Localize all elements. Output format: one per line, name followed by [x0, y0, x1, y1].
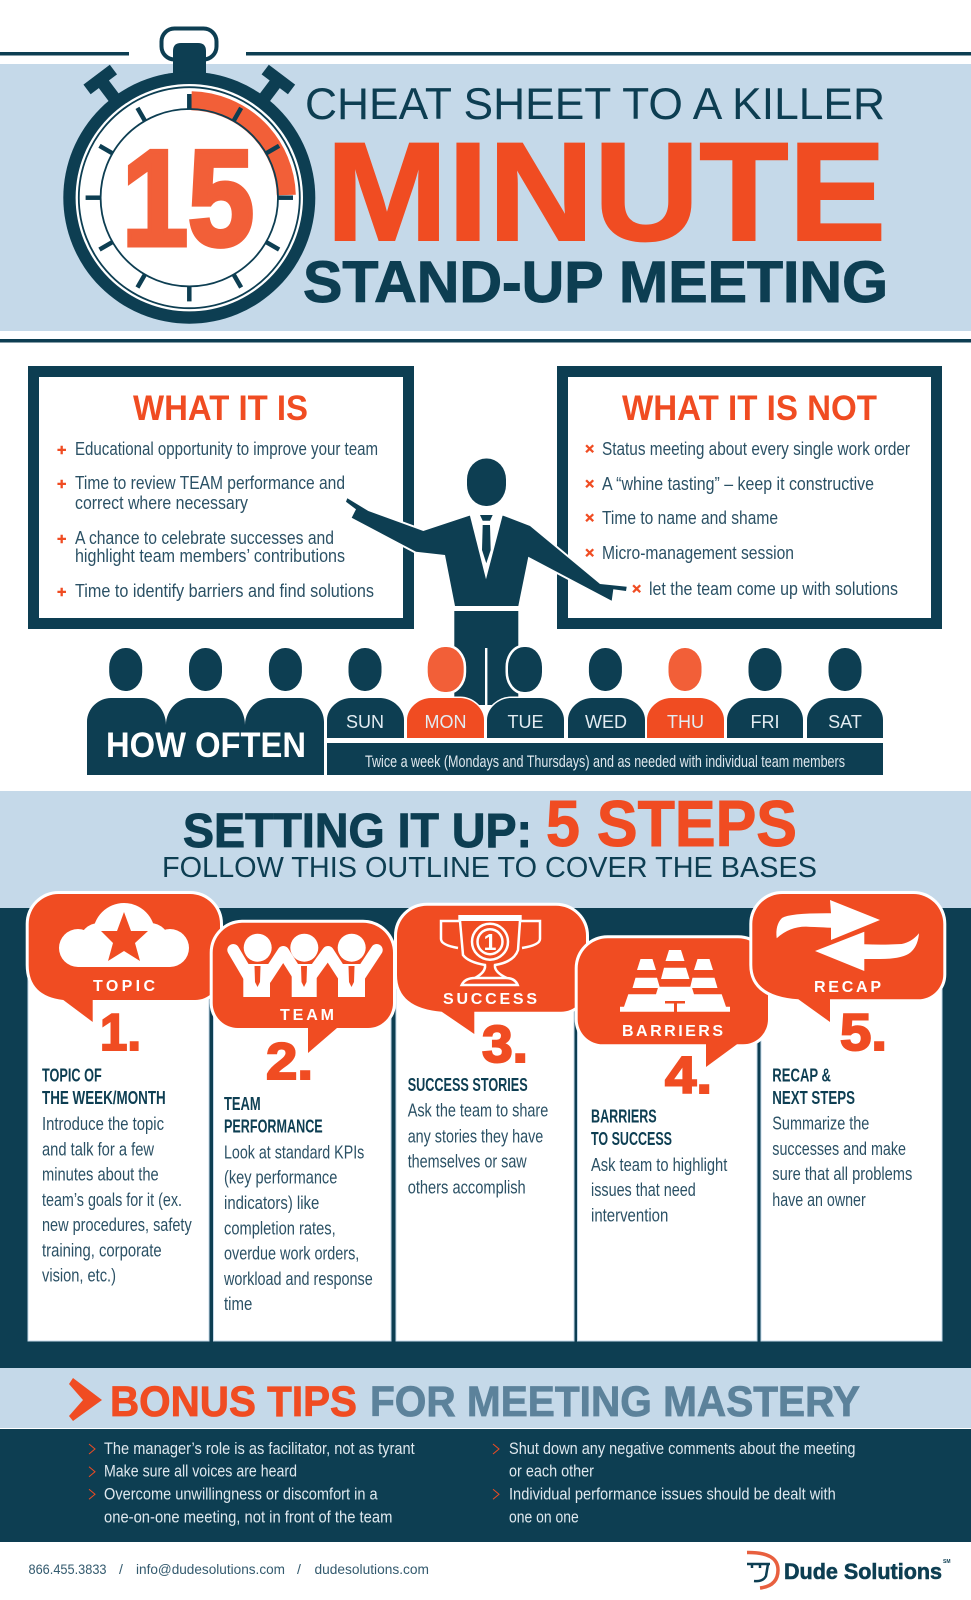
panel: what it is not: × — [585, 510, 594, 527]
step 1: topic: Introduce the topic — [42, 1114, 164, 1134]
step 5: recap: RECAP — [814, 979, 881, 996]
weekday row: FRI — [750, 712, 780, 732]
step 2: team — [213, 923, 393, 1314]
panel: what it is not: A “whine tasting” – keep it constructive — [602, 474, 874, 494]
panel: what it is not: Status meeting about every single work order — [602, 439, 910, 459]
heading: setting it up — [162, 787, 817, 884]
step 3: success: others accomplish — [408, 1177, 526, 1197]
footer contact: dudesolutions.com — [314, 1561, 429, 1577]
step 5: recap: successes and make — [772, 1139, 906, 1159]
icon: three team members — [233, 934, 377, 997]
weekday row: WED — [585, 712, 627, 732]
step 1: topic: new procedures, safety — [42, 1215, 192, 1235]
title: STAND-UP MEETING — [303, 250, 888, 315]
heading: setting it up: FOLLOW THIS OUTLINE TO COVER THE BASES — [162, 852, 817, 884]
bonus tips list: one-on-one meeting, not in front of the team — [104, 1507, 392, 1526]
footer contact: info@dudesolutions.com — [136, 1561, 285, 1577]
how often block: HOW OFTEN — [106, 726, 306, 765]
panel: what it is not: let the team come up with solutions — [649, 579, 898, 599]
panel: what it is: A chance to celebrate successes and — [75, 528, 334, 548]
panel: what it is not — [562, 372, 936, 624]
weekday row: MON — [424, 712, 466, 732]
title: CHEAT SHEET TO A KILLER — [305, 80, 885, 129]
heading: setting it up: SETTING IT UP: — [183, 805, 532, 858]
presenter figure — [346, 458, 627, 708]
step 2: team: TEAM — [280, 1007, 334, 1024]
step 1: topic: and talk for a few — [42, 1139, 155, 1159]
step 3: success: any stories they have — [408, 1126, 543, 1146]
step 3: success: Ask the team to share — [408, 1101, 548, 1121]
icon: traffic cones — [620, 950, 730, 1012]
weekday row: SAT — [828, 712, 862, 732]
step 5: recap: sure that all problems — [772, 1164, 912, 1184]
step 3: success: themselves or saw — [408, 1151, 527, 1171]
panel: what it is not: Time to name and shame — [602, 508, 778, 528]
step 4: barriers: 4. — [665, 1047, 712, 1105]
icon: stopwatch — [63, 28, 315, 324]
icon: trophy — [441, 915, 540, 985]
footer contact: / — [119, 1561, 123, 1577]
step 1: topic: TOPIC OF — [42, 1065, 102, 1086]
panel: what it is: + — [57, 531, 66, 548]
step 5: recap: have an owner — [772, 1190, 866, 1210]
step 4: barriers: Ask team to highlight — [591, 1155, 727, 1175]
step 2: team: TEAM — [224, 1093, 261, 1114]
weekday row — [327, 698, 883, 775]
step 3: success — [397, 906, 586, 1197]
bonus tips heading: FOR MEETING MASTERY — [370, 1378, 860, 1426]
logo: Dude Solutions — [747, 1552, 950, 1588]
step 2: team: indicators) like — [224, 1193, 319, 1213]
audience heads — [109, 647, 861, 692]
step 5: recap: 5. — [840, 1004, 887, 1062]
step 1: topic: training, corporate — [42, 1241, 162, 1261]
bonus tips list: one on one — [509, 1507, 579, 1526]
step 5: recap: Summarize the — [772, 1113, 869, 1133]
step 4: barriers: BARRIERS — [591, 1105, 657, 1126]
weekday row: SUN — [346, 712, 384, 732]
panel: what it is: highlight team members’ contributions — [75, 546, 345, 566]
panel: what it is not: × — [585, 545, 594, 562]
step 2: team: overdue work orders, — [224, 1243, 359, 1263]
step 4: barriers — [578, 938, 768, 1226]
bonus tips heading: BONUS TIPS — [110, 1378, 357, 1426]
panel: what it is not: × — [585, 441, 594, 458]
footer contact: 866.455.3833 — [28, 1561, 107, 1577]
bonus tips list: or each other — [509, 1462, 594, 1481]
panel: what it is: correct where necessary — [75, 493, 248, 513]
panel: what it is — [34, 372, 408, 624]
step 1: topic: 1. — [100, 1004, 141, 1062]
weekday row: TUE — [508, 712, 544, 732]
bonus tips list: Individual performance issues should be dealt with — [509, 1484, 836, 1503]
step 2: team: Look at standard KPIs — [224, 1142, 364, 1162]
weekday row: THU — [667, 712, 704, 732]
logo: Dude Solutions: SM — [943, 1559, 950, 1565]
step 4: barriers: TO SUCCESS — [591, 1128, 672, 1149]
step 5: recap — [752, 894, 943, 1210]
header band — [0, 52, 971, 342]
footer contact: / — [297, 1561, 301, 1577]
icon: recap arrows — [776, 900, 919, 971]
panel: what it is not: × — [632, 581, 641, 598]
step 5: recap: RECAP & — [772, 1065, 831, 1086]
bonus tips heading — [0, 1368, 971, 1428]
footer contact — [28, 1561, 429, 1577]
step 2: team: workload and response — [223, 1269, 373, 1289]
step 2: team: time — [224, 1294, 252, 1314]
panel: what it is: Time to identify barriers and find solutions — [75, 581, 374, 601]
step 3: success: SUCCESS STORIES — [408, 1074, 528, 1095]
step 1: topic: vision, etc.) — [42, 1266, 116, 1286]
panel: what it is: Time to review TEAM performance and — [75, 473, 345, 493]
title: MINUTE — [326, 113, 886, 270]
step 2: team: PERFORMANCE — [224, 1115, 323, 1136]
step 1: topic: THE WEEK/MONTH — [42, 1087, 166, 1108]
panel: what it is not: × — [585, 476, 594, 493]
bonus tips list: Overcome unwillingness or discomfort in a — [104, 1484, 378, 1503]
step 2: team: completion rates, — [224, 1218, 336, 1238]
step 5: recap: NEXT STEPS — [772, 1087, 855, 1108]
step 3: success: SUCCESS — [443, 991, 537, 1008]
icon: trophy: 1 — [484, 929, 497, 955]
step 4: barriers: issues that need — [591, 1180, 696, 1200]
title — [303, 80, 888, 315]
step 2: team: 2. — [266, 1033, 313, 1091]
step 4: barriers: BARRIERS — [622, 1023, 723, 1040]
panel: what it is: WHAT IT IS — [133, 389, 308, 428]
step 4: barriers: intervention — [591, 1206, 668, 1226]
bonus tips list: Shut down any negative comments about the meeting — [509, 1439, 856, 1458]
panel: what it is: + — [57, 476, 66, 493]
icon: stopwatch: 15 — [122, 122, 254, 274]
panel: what it is: + — [57, 584, 66, 601]
bonus tips list: Make sure all voices are heard — [104, 1462, 297, 1481]
bonus tips list — [0, 1429, 971, 1542]
panel: what it is: Educational opportunity to improve your team — [75, 439, 378, 459]
step 2: team: (key performance — [224, 1167, 337, 1187]
step 1: topic: minutes about the — [42, 1165, 159, 1185]
step 1: topic — [29, 894, 220, 1286]
logo: Dude Solutions: Dude Solutions — [784, 1559, 942, 1584]
step columns — [28, 960, 942, 1341]
panel: what it is not: WHAT IT IS NOT — [622, 389, 877, 428]
step 3: success: 3. — [482, 1016, 528, 1074]
icon: cloud with star — [59, 903, 189, 967]
step 1: topic: TOPIC — [93, 978, 155, 995]
panel: what it is not: Micro-management session — [602, 543, 794, 563]
how often block — [87, 698, 324, 775]
heading: setting it up: 5 STEPS — [546, 787, 797, 860]
step 1: topic: team’s goals for it (ex. — [42, 1190, 182, 1210]
bonus tips list: The manager’s role is as facilitator, not as tyrant — [104, 1439, 415, 1458]
panel: what it is: + — [57, 442, 66, 459]
steps section background — [0, 791, 971, 1368]
